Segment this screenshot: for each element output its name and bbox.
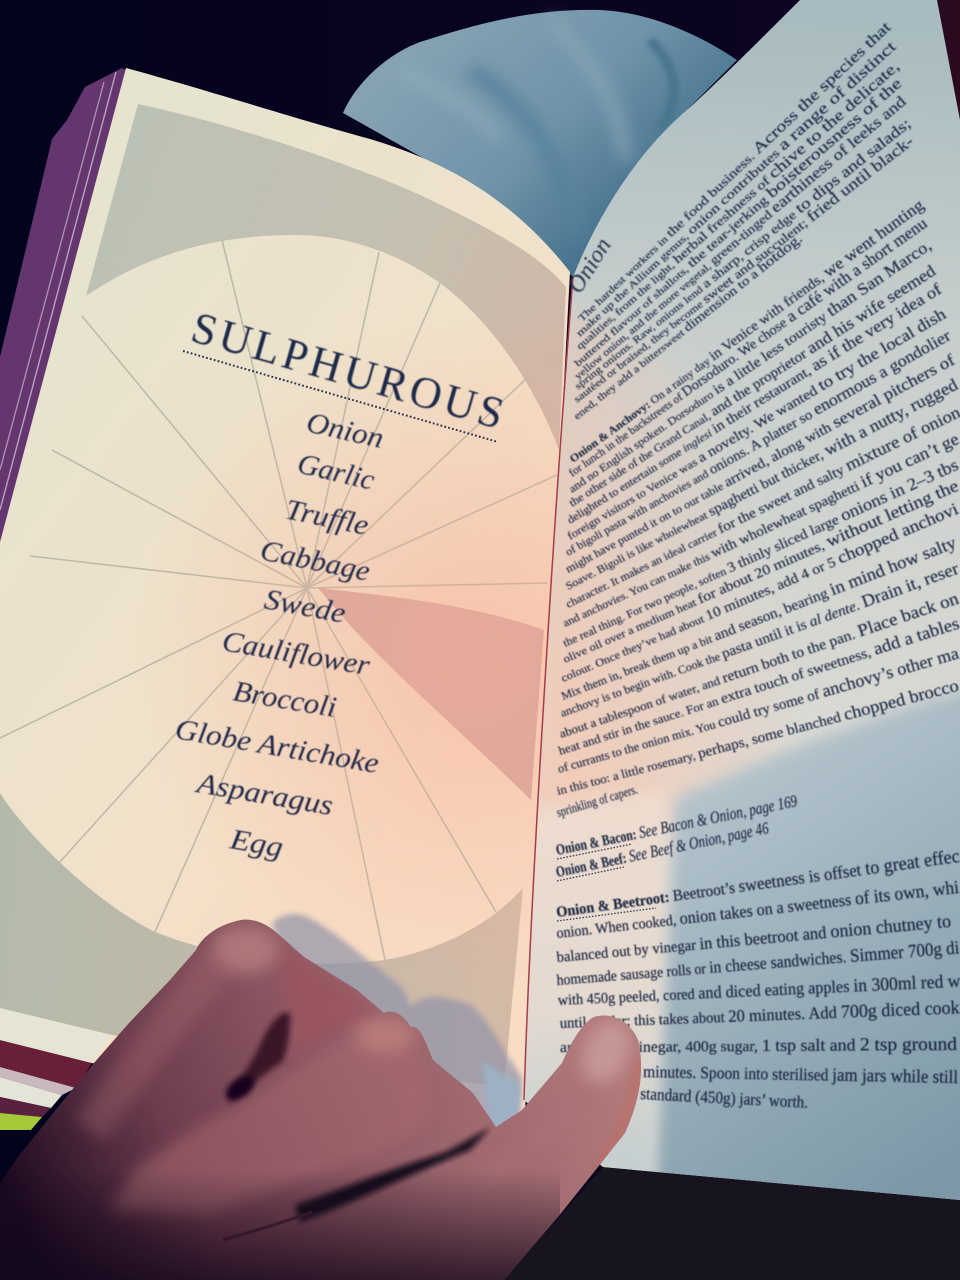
ingredient list: Egg (227, 823, 285, 864)
Onion & Beetroot entry: minutes. Spoon into sterilised jam jars while still (643, 1062, 958, 1088)
ingredient list: Asparagus (193, 767, 335, 822)
Onion & Beetroot entry: balanced out by vinegar in this beetroot and onion chutney to (556, 912, 952, 967)
ingredient list: Cabbage (258, 534, 373, 588)
middle finger body (110, 1045, 412, 1218)
Onion & Anchovy entry: the real thing. For two people, soften 3 thinly sliced large onions in 2–3 tbs (559, 455, 960, 651)
gutter line (524, 277, 573, 1100)
Onion & Anchovy entry: foreign visitors to Venice was a novelty. We wanted to try the local dish (562, 304, 950, 543)
running head: Onion: Onion (563, 234, 617, 298)
ingredient list: Swede (262, 583, 348, 630)
intro paragraph: The hardest workers in the food business. Across the species that (573, 18, 895, 325)
right page: Onion text (515, 0, 960, 1230)
blue shadow between fingers and thumb (482, 1060, 520, 1135)
intro paragraph: qualities, from the light, herbal freshness of chive to the delicate, (571, 58, 903, 353)
dotted underlines of entry names (557, 844, 656, 921)
warm light on page (0, 68, 570, 1100)
Onion & Beetroot entry: onion. When cooked, onion takes on a sweetness of its own, whi (555, 878, 960, 943)
thumbnail (578, 1018, 633, 1086)
thumb highlight (480, 1090, 590, 1180)
thumb red edge (598, 1060, 640, 1165)
Onion & Anchovy entry: Mix them in, break them up a bit and season, bearing in mind how salty (557, 532, 959, 704)
Onion & Beetroot entry: homemade sausage rolls or in cheese sandwiches. Simmer 700g di (556, 938, 960, 990)
Onion & Anchovy entry: character. It makes an ideal carrier for the sweet and salty mixture of onion (561, 402, 960, 612)
ingredient list: Cauliflower (220, 625, 373, 682)
intro paragraph: make up the Allium genus, onion contributes a range of distinct (571, 37, 900, 340)
ingredient list (173, 407, 387, 864)
crease between index and middle finger (228, 1012, 290, 1104)
crease above the thumb (295, 1127, 491, 1222)
Onion & Anchovy entry: heat and stir in the sauce. For an extra touch of sweetness, add a tables (555, 613, 960, 759)
grey band above the wheel (86, 104, 566, 450)
ingredient list: Globe Artichoke (173, 713, 381, 780)
heading: SULPHUROUS: SULPHUROUS (186, 303, 509, 438)
grey band below the wheel (0, 793, 523, 1087)
Onion & Anchovy entry (554, 195, 960, 820)
Onion & Anchovy entry: and no English spoken. Dorsoduro is a little less touristy than San Marco, (564, 236, 935, 496)
hand holding the book (0, 920, 641, 1280)
intro paragraph: buttered flavour of shallots, the tear-jerking boisterousness of the (569, 75, 905, 370)
ingredient list: Broccoli (231, 675, 339, 724)
Onion & Anchovy entry: sprinkling of capers. (555, 781, 639, 820)
ingredient list: Garlic (294, 448, 378, 497)
intro paragraph (569, 18, 917, 423)
dotted rule under heading (183, 351, 498, 442)
Onion & Anchovy entry: of currants to the onion mix. You could try some of anchovy’s other ma (555, 643, 960, 777)
Onion & Anchovy entry: about a tablespoon of water, and return both to the pan. Place back on (556, 588, 960, 742)
index finger lobe (287, 967, 364, 1044)
cross references: Onion & Bacon: See Bacon & Onion, page 169 (554, 791, 799, 859)
page stack, lower left (0, 1040, 92, 1130)
denim knee behind the book (343, 10, 737, 277)
middle knuckle highlight (355, 1017, 415, 1053)
cross references: Onion & Beef: See Beef & Onion, page 46 (554, 818, 771, 881)
Onion & Beetroot entry (555, 846, 960, 1112)
Onion & Beetroot entry: with 450g peeled, cored and diced eating apples in 300ml red w (557, 972, 960, 1010)
hand shadow on page (272, 914, 522, 1130)
Onion & Anchovy entry: colour. Once they’ve had about 10 minutes, add 4 or 5 chopped anchovi (557, 499, 960, 686)
Onion & Anchovy entry: in this too: a little rosemary, perhaps, some blanched chopped brocco (554, 675, 960, 799)
shadow over lower page (652, 685, 960, 1230)
Onion & Anchovy entry: olive oil over a medium heat for about 20 minutes, without letting the (559, 476, 960, 667)
intro paragraph: sautéed or braised, they become sweet and succulent; fried until black- (569, 133, 917, 406)
Onion & Anchovy entry: delighted to entertain some inglesi in their restaurant, as if the very idea of (562, 279, 945, 527)
Onion & Anchovy entry: anchovy is to begin with. Cook the pasta until it is al dente. Drain it, reser (557, 558, 960, 721)
crease line (223, 1212, 312, 1240)
Onion & Beetroot entry: until tender; this takes about 20 minutes. Add 700g diced cook (559, 998, 960, 1033)
lime page edge (0, 1113, 42, 1130)
purple page block edge, left (0, 68, 126, 542)
fabric below the book (504, 1167, 960, 1280)
mauve highlighted wedge (318, 588, 544, 800)
ingredient list: Truffle (283, 494, 371, 542)
Onion & Beetroot entry: and 300ml vinegar, 400g sugar, 1 tsp salt and 2 tsp ground (560, 1035, 958, 1057)
intro paragraph: spring onions. Raw, onions lend a sharp, crisp edge to dips and salads; (570, 115, 914, 393)
lower-left lit margin (515, 790, 668, 1190)
left page: Sulphurous flavour wheel (0, 68, 570, 1130)
Onion & Anchovy entry: and anchovies. You can make this with wholewheat spaghetti if you can’t ge (559, 429, 960, 631)
darkening at foot of hand (47, 1178, 560, 1280)
Onion & Beetroot entry: Onion & Beetroot: Beetroot’s sweetness is offset to great effec (555, 846, 960, 922)
dark pocket in crease (222, 1071, 258, 1105)
warm gutter light (538, 308, 744, 810)
wheel spokes (0, 240, 557, 960)
intro paragraph: ened, they add a bittersweet dimension to a hotdog. (570, 231, 806, 423)
ingredient list: Onion (303, 407, 387, 455)
Onion & Anchovy entry: Soave. Bigoli is like wholewheat spaghetti but thicker, with a nutty, rugged (561, 375, 960, 594)
Onion & Anchovy entry: for lunch in the backstreets of Dorsoduro. We chose a café with a short menu (563, 213, 931, 480)
pale strip at page foot (0, 1008, 112, 1063)
Onion & Anchovy entry: of bigoli pasta with anchovies and onions. A platter so enormous a gondolier (561, 326, 954, 559)
index finger body (90, 960, 220, 1130)
intro paragraph: yellow onion, and the more vegetal, green-tinged earthiness of leeks and (570, 93, 910, 383)
knuckle highlight (211, 926, 279, 974)
Onion & Anchovy entry: might have punted it on to our table arrived, along with several pitchers of (561, 350, 958, 577)
Onion & Beetroot entry: standard (450g) jars’ worth. (640, 1084, 809, 1112)
Onion & Anchovy entry: Onion & Anchovy: On a rainy day in Venice with friends, we went hunting (564, 195, 927, 466)
Onion & Anchovy entry: the other side of the Grand Canal, and the proprietor and his wife seemed (564, 261, 940, 510)
